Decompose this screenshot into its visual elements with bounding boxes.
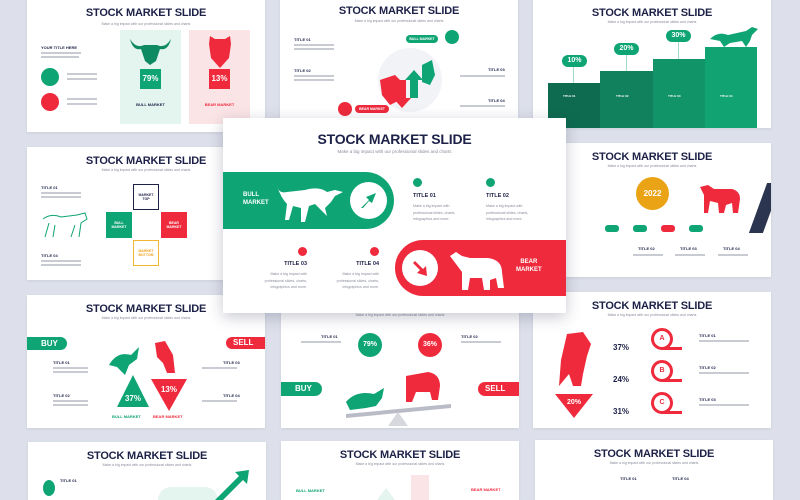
text block: title 03: Make a big impact with	[270, 272, 307, 276]
slide: growth bars: Make a big impact with our professional slides and charts	[608, 20, 696, 24]
panel: bull market: 79%	[142, 74, 158, 83]
subtitle: Make a big impact with our professional slides and charts	[337, 149, 452, 154]
slide: buy sell triangles: BULL MARKET	[112, 414, 141, 419]
slide: buy sell triangles: Make a big impact with our professional slides and charts	[102, 316, 190, 320]
slide: buy sell triangles: TITLE 01	[53, 360, 70, 365]
icon: up arrow circle	[350, 182, 387, 219]
slide: 2022 quarters: TITLE 02	[638, 246, 655, 251]
slide: growth bars	[533, 0, 771, 128]
slide: row4 right: TITLE 04	[672, 476, 689, 481]
chart: arrows with bull and bear	[378, 48, 442, 112]
panel: bull market	[120, 30, 181, 124]
tag: sell	[226, 337, 265, 349]
diagram: market cycle: TOP	[142, 197, 150, 201]
text block: title 04: TITLE 04	[356, 261, 379, 267]
chart: seesaw bull bear	[346, 372, 451, 426]
bar chart: TITLE 04	[720, 94, 733, 98]
slide: bull market bear market arrows: TITLE 02	[294, 68, 311, 73]
slide: main featured: infographics and more.	[413, 217, 450, 221]
text block: title 02	[486, 178, 528, 221]
title: STOCK MARKET SLIDE	[339, 5, 459, 17]
slide: ABC percentages: Make a big impact with our professional slides and charts	[608, 313, 696, 317]
slide: row4 left: Make a big impact with our professional slides and charts	[103, 463, 191, 467]
list: percentages: 37%	[613, 343, 629, 352]
panel: bull market band	[223, 172, 394, 229]
bar chart: 10%	[567, 57, 582, 64]
title: STOCK MARKET SLIDE	[594, 448, 714, 460]
panel: bear market: 13%	[211, 74, 228, 83]
title: STOCK MARKET SLIDE	[86, 155, 206, 167]
slide: bull market bear market arrows: Make a big impact with our professional slides and charts	[355, 19, 443, 23]
slide: row4 left	[28, 442, 266, 500]
panel: bull market band: BULL	[243, 192, 259, 198]
slide: row4 left: TITLE 01	[60, 478, 77, 483]
chart: percentage circles	[358, 333, 382, 357]
title: STOCK MARKET SLIDE	[86, 7, 206, 19]
tag: bear market	[338, 102, 352, 116]
list: A B C circles: A	[659, 335, 665, 342]
slide: 2022 quarters	[533, 143, 771, 277]
tag: bull market	[406, 35, 438, 43]
icon: hand	[749, 183, 781, 233]
icon: bull outline	[42, 212, 88, 238]
text block: title 04: Make a big impact with	[342, 272, 379, 276]
list: A B C circles: C	[659, 399, 665, 406]
tag: sell: SELL	[485, 384, 505, 393]
panel: bear market	[189, 30, 250, 124]
slide: ABC percentages	[533, 292, 771, 428]
icon: bull	[277, 186, 343, 222]
tag: sell: SELL	[233, 338, 253, 347]
chart: triangles: 13%	[161, 385, 177, 394]
panel: bull market: BULL MARKET	[136, 102, 165, 107]
panel: bear market: BEAR MARKET	[205, 102, 234, 107]
text block: title 03: infographics and more.	[270, 285, 307, 289]
panel: bear market band	[395, 240, 566, 296]
list: percentages: 24%	[613, 375, 629, 384]
slide: bull market bear market arrows	[280, 0, 518, 120]
panel: bear market band: MARKET	[516, 267, 542, 273]
bar chart: TITLE 01	[563, 94, 576, 98]
chart: percentage circles: 79%	[363, 341, 377, 348]
slide: row4 right: TITLE 01	[620, 476, 637, 481]
icon: standing bear with 20% fall: 20%	[567, 399, 582, 406]
slide: main featured: professional slides, charts,	[486, 210, 528, 214]
text block: title 03	[264, 247, 307, 289]
slide: buy sell triangles: BEAR MARKET	[153, 414, 183, 419]
slide: seesaw: 36%	[423, 341, 437, 348]
text block: title 04: infographics and more.	[342, 285, 379, 289]
slide: seesaw: Make a big impact with our professional slides and charts	[356, 313, 444, 317]
list: percentages: 31%	[613, 407, 629, 416]
icon: 2022 circle: 2022	[644, 189, 661, 198]
tag: buy	[281, 382, 322, 396]
title: STOCK MARKET SLIDE	[340, 449, 460, 461]
slide: market cycle flow: TITLE 01	[41, 185, 58, 190]
title: STOCK MARKET SLIDE	[86, 303, 206, 315]
panel: bull market band: MARKET	[243, 200, 269, 206]
slide: bull market bear market arrows: BEAR MARKET	[359, 107, 385, 111]
slide: market cycle flow: TITLE 04	[41, 253, 58, 258]
text block: title 04: professional slides, charts,	[337, 278, 379, 282]
slide: row4 middle: BEAR MARKET	[471, 487, 501, 492]
diagram: market cycle: MARKET	[138, 249, 153, 253]
icon: down arrow circle	[402, 250, 438, 286]
slide: bull vs bear cards	[27, 0, 265, 132]
diagram: market cycle: MARKET	[112, 225, 126, 229]
diagram: market cycle: BEAR	[169, 221, 179, 225]
chart: triangles: 37%	[125, 394, 141, 403]
chart: triangles	[109, 341, 187, 411]
slide: bull vs bear cards: Make a big impact with our professional slides and charts	[102, 22, 190, 26]
slide: bull market bear market arrows: TITLE 03	[488, 67, 505, 72]
text block: title 01	[413, 178, 456, 221]
quarter labels	[605, 225, 703, 232]
bar chart: TITLE 02	[616, 94, 629, 98]
list: A B C circles	[651, 328, 682, 414]
slide: seesaw: TITLE 01	[321, 334, 338, 339]
slide: market cycle flow	[27, 147, 265, 280]
title: STOCK MARKET SLIDE	[87, 450, 207, 462]
slide: bull market bear market arrows: TITLE 01	[294, 37, 311, 42]
bar chart: 30%	[671, 32, 686, 39]
title: STOCK MARKET SLIDE	[592, 151, 712, 163]
text block: title 04	[336, 247, 380, 289]
slide: 2022 quarters: Make a big impact with our professional slides and charts	[608, 164, 696, 168]
slide: buy sell triangles: TITLE 04	[223, 393, 240, 398]
diagram: market cycle: MARKET	[166, 225, 181, 229]
diagram: market cycle: BOTTOM	[138, 253, 154, 257]
slide: row4 middle: BULL MARKET	[296, 488, 325, 493]
title: STOCK MARKET SLIDE	[317, 131, 472, 147]
diagram: market cycle	[106, 184, 187, 266]
icon: 2022 circle	[636, 177, 669, 210]
diagram: market cycle: BULL	[114, 221, 124, 225]
tag: buy	[27, 337, 67, 350]
list: A B C circles: B	[659, 367, 665, 374]
slide: main featured: infographics and more.	[486, 217, 523, 221]
title: STOCK MARKET SLIDE	[592, 7, 712, 19]
icon: bull circle	[41, 68, 59, 86]
tag: buy: BUY	[295, 384, 312, 393]
slide: row4 right	[535, 440, 773, 500]
tag: buy: BUY	[41, 339, 58, 348]
slide: main featured: TITLE 01	[413, 193, 436, 199]
icon: standing bear with 20% fall	[555, 332, 593, 418]
title: STOCK MARKET SLIDE	[592, 300, 712, 312]
slide: main featured: TITLE 02	[486, 193, 509, 199]
text block: title 03: professional slides, charts,	[265, 278, 307, 282]
slide: buy sell triangles	[27, 295, 265, 428]
slide: main featured: Make a big impact with	[486, 204, 523, 208]
slide: 2022 quarters: TITLE 03	[680, 246, 697, 251]
slide: bull vs bear cards: YOUR TITLE HERE	[41, 45, 77, 50]
slide: row4 right: Make a big impact with our professional slides and charts	[610, 461, 698, 465]
slide: ABC percentages: TITLE 02	[699, 365, 716, 370]
panel: bear market band: BEAR	[520, 259, 537, 265]
tag: bull market: BULL MARKET	[409, 37, 435, 41]
slide: main featured: Make a big impact with	[413, 204, 450, 208]
icon: bear	[450, 252, 504, 290]
slide: main featured: professional slides, charts,	[413, 210, 455, 214]
list: percentages	[613, 343, 629, 416]
bar chart: TITLE 03	[668, 94, 681, 98]
slide: seesaw: TITLE 02	[461, 334, 478, 339]
slide: market cycle flow: Make a big impact with our professional slides and charts	[102, 168, 190, 172]
bar chart: 20%	[619, 45, 634, 52]
slide: main featured	[223, 118, 566, 313]
slide: seesaw	[281, 300, 519, 428]
diagram: market cycle: MARKET	[138, 193, 153, 197]
slide: ABC percentages: TITLE 01	[699, 333, 716, 338]
icon: bear circle	[41, 93, 59, 111]
slide: row4 middle: Make a big impact with our professional slides and charts	[356, 462, 444, 466]
slide: row4 middle	[281, 441, 519, 500]
text block: title 03: TITLE 03	[284, 261, 307, 267]
bar chart	[548, 27, 758, 128]
tag: sell	[478, 382, 519, 396]
slide: 2022 quarters: TITLE 04	[723, 246, 740, 251]
slide: buy sell triangles: TITLE 02	[53, 393, 70, 398]
slide: buy sell triangles: TITLE 03	[223, 360, 240, 365]
slide: bull market bear market arrows: TITLE 04	[488, 98, 505, 103]
slide: ABC percentages: TITLE 03	[699, 397, 716, 402]
icon: red bear	[700, 185, 740, 213]
